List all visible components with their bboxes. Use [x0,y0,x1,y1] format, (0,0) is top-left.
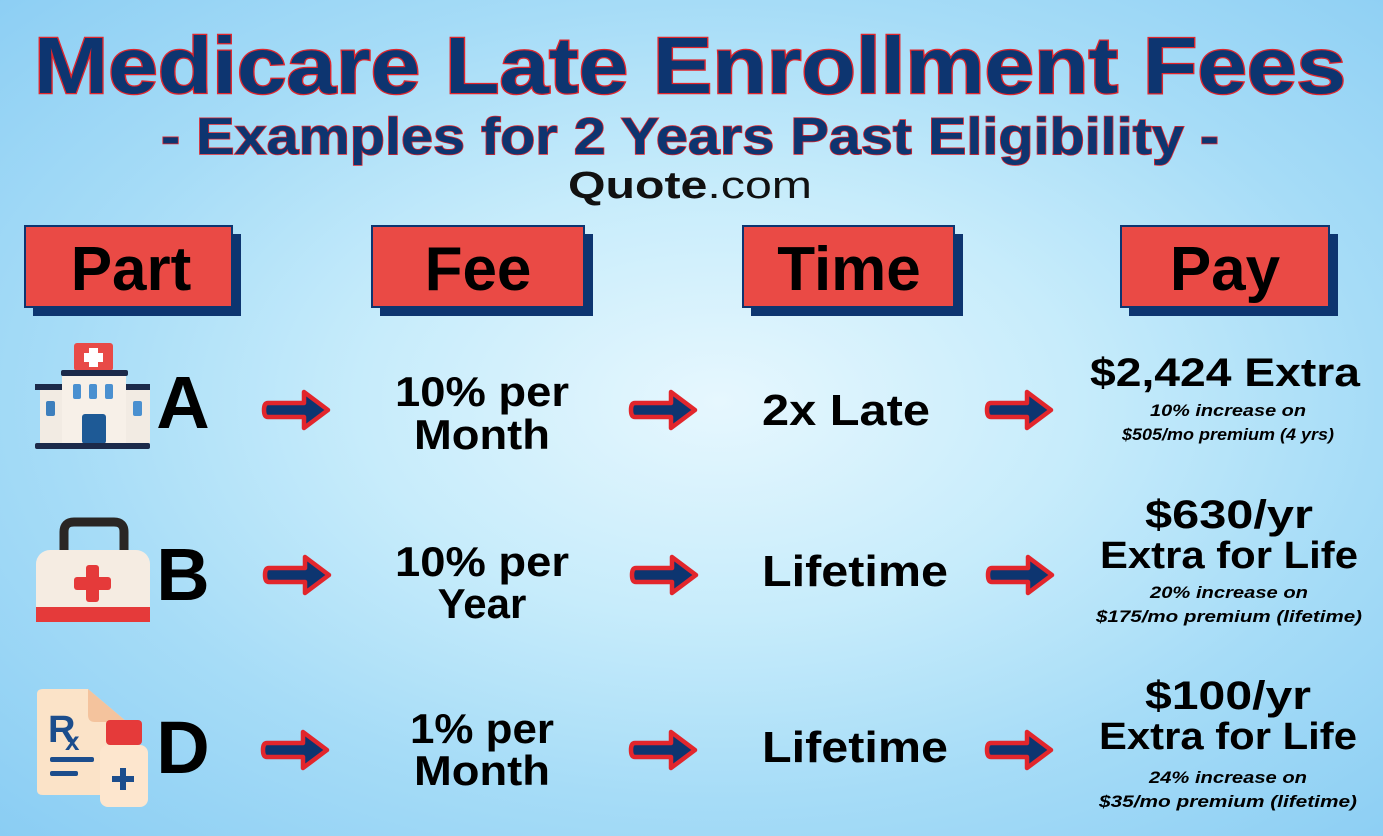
label: A: A [156,361,210,444]
pay column: 10% increase on [1150,401,1306,420]
time column: 2x Late [762,386,930,435]
fee column: Year [438,580,526,627]
fee column: Month [414,747,550,794]
fee column [395,368,569,794]
pay column: 24% increase on [1148,768,1307,787]
time column: Lifetime [762,723,948,772]
fee column: 10% per [395,368,569,415]
header: Pay [1121,226,1338,316]
pay column: $35/mo premium (lifetime) [1098,792,1357,811]
pay column: $100/yr [1145,674,1311,718]
title: Medicare Late Enrollment Fees [34,21,1346,110]
icon: prescription [37,689,148,807]
label: B: B [156,533,210,616]
icon: prescription: x [65,726,80,756]
header: Pay: Pay [1170,235,1281,304]
logo: Quote.com: Quote .com [568,165,812,207]
pay column: 20% increase on [1149,583,1308,602]
time column [762,386,948,772]
pay column: $175/mo premium (lifetime) [1095,607,1362,626]
header: Part: Part [71,235,191,304]
header: Part [25,226,241,316]
pay column: Extra for Life [1100,535,1358,577]
pay column: $630/yr [1145,493,1313,537]
icon: medical kit [36,522,150,622]
fee column: 1% per [410,705,554,752]
icon: prescription: R [48,709,75,751]
pay column: $2,424 Extra [1090,351,1361,395]
header: Fee: Fee [425,235,531,304]
label: D: D [156,706,210,789]
header: Time [743,226,963,316]
pay column: Extra for Life [1099,716,1357,758]
icon: hospital [35,343,150,449]
pay column: $505/mo premium (4 yrs) [1121,425,1334,444]
header: Fee [372,226,593,316]
fee column: 10% per [395,538,569,585]
pay column [1090,351,1362,811]
arrows [263,392,1052,768]
fee column: Month [414,411,550,458]
subtitle: - Examples for 2 Years Past Eligibility - [161,108,1219,166]
time column: Lifetime [762,547,948,596]
header: Time: Time [777,235,921,304]
